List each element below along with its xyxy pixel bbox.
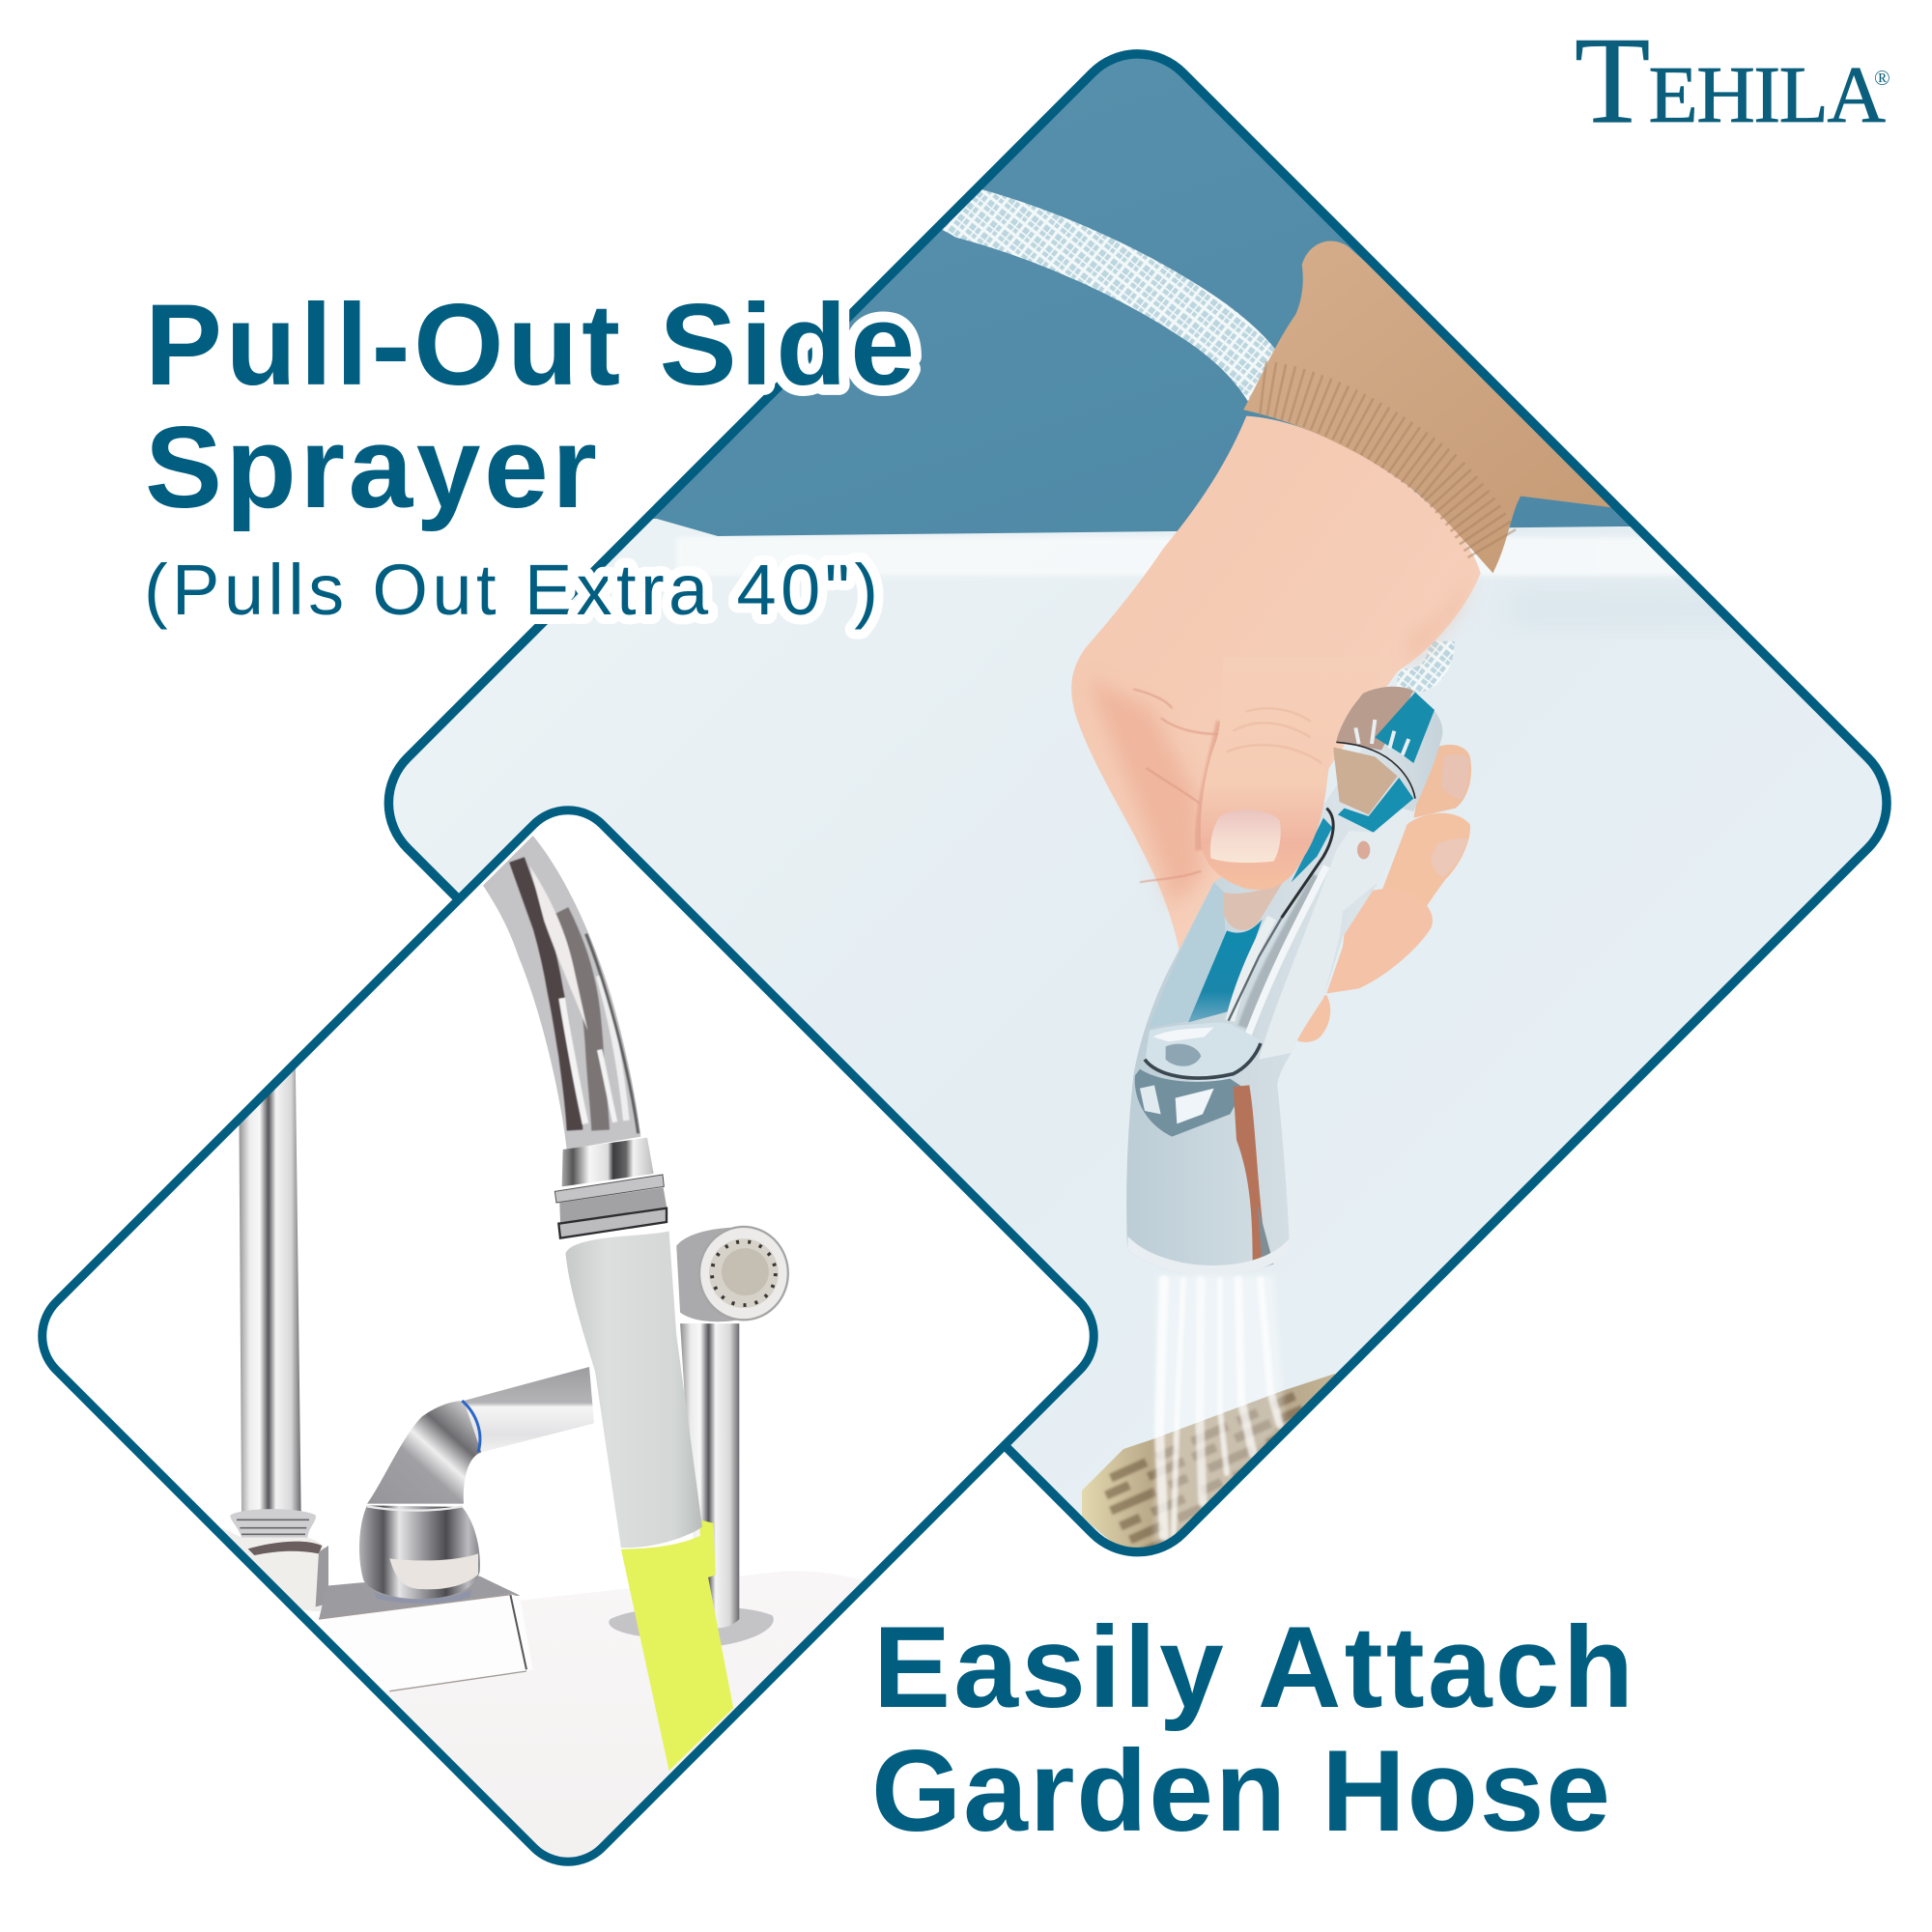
blue wall xyxy=(653,58,1631,536)
right bright chrome area xyxy=(1259,809,1413,1060)
grey adapter xyxy=(565,1231,702,1548)
hose near sprayer xyxy=(1398,641,1442,681)
chrome bands xyxy=(1230,918,1272,1021)
blue ring xyxy=(462,1401,480,1452)
heading: pull-out side sprayer: Pull-Out Side xyxy=(145,280,915,410)
hand shading xyxy=(1090,567,1474,906)
thumb shadow xyxy=(1199,722,1220,850)
heading: easily attach garden hose xyxy=(871,1603,1634,1856)
handle bulb xyxy=(359,1505,480,1599)
hand creases xyxy=(1133,689,1220,882)
head blue band xyxy=(1375,693,1435,763)
connector nut xyxy=(554,1175,668,1238)
groove lines xyxy=(1282,809,1333,918)
head reflection stripes xyxy=(1355,720,1408,755)
logo: Tehila: ® xyxy=(1874,66,1890,90)
sink background xyxy=(393,519,1882,1540)
heading: pull-out side sprayer: Sprayer xyxy=(145,403,597,532)
counter top xyxy=(370,1571,902,1926)
hand reflection on chrome xyxy=(1223,883,1283,930)
sprayer collar xyxy=(1145,1022,1261,1081)
yellow hose xyxy=(621,1536,733,1771)
panel: small diamond photo of faucet with garden hose xyxy=(22,790,1114,1926)
sprayer lip xyxy=(1127,1236,1290,1276)
small diamond outline xyxy=(22,790,1114,1882)
left chrome face xyxy=(1150,882,1225,1027)
handle neck xyxy=(367,1401,481,1504)
sink shadow xyxy=(1596,608,1713,610)
lower head reflection xyxy=(1333,747,1398,814)
subheading: pulls out extra: (Pulls Out Extra 40") xyxy=(144,550,878,630)
spout xyxy=(483,836,640,1150)
handle arm xyxy=(464,1367,594,1452)
heading: easily attach garden hose: Garden Hose xyxy=(871,1726,1610,1856)
heading: easily attach garden hose: Easily Attach xyxy=(873,1603,1634,1732)
lower collar reflection xyxy=(1135,1069,1244,1137)
logo: Tehila: TEHILA xyxy=(1575,12,1886,149)
big diamond outline xyxy=(362,28,1913,1578)
thumb wrinkles xyxy=(1227,708,1321,763)
thumbnail xyxy=(1210,810,1281,863)
thumb xyxy=(1194,694,1363,891)
sleeve cuff xyxy=(1243,241,1644,573)
finger reflection spot xyxy=(1357,841,1370,859)
side sprayer xyxy=(609,1227,788,1649)
sprayer head xyxy=(1126,687,1442,1276)
ferrule xyxy=(562,1138,654,1186)
straw brush under spray xyxy=(1082,1374,1335,1548)
blue strip near thumb xyxy=(1292,818,1332,882)
water spray xyxy=(1154,1275,1285,1546)
copper reflection xyxy=(1233,1085,1264,1260)
faucet handle xyxy=(359,1367,594,1604)
base plate xyxy=(319,1577,533,1691)
head hand reflection xyxy=(1336,687,1413,751)
left riser tube xyxy=(239,998,301,1514)
braided hose xyxy=(942,189,1275,402)
back fingers xyxy=(1296,745,1471,1042)
heading: pull-out side sprayer xyxy=(145,280,915,532)
sink lip highlight xyxy=(678,537,1679,576)
head seam xyxy=(1336,742,1415,799)
hand palm xyxy=(1071,416,1481,968)
blue chrome reflection xyxy=(1188,920,1263,1022)
panel: large diamond photo of hand using sprayer xyxy=(362,28,1913,1584)
riser collar and base xyxy=(222,1509,328,1611)
